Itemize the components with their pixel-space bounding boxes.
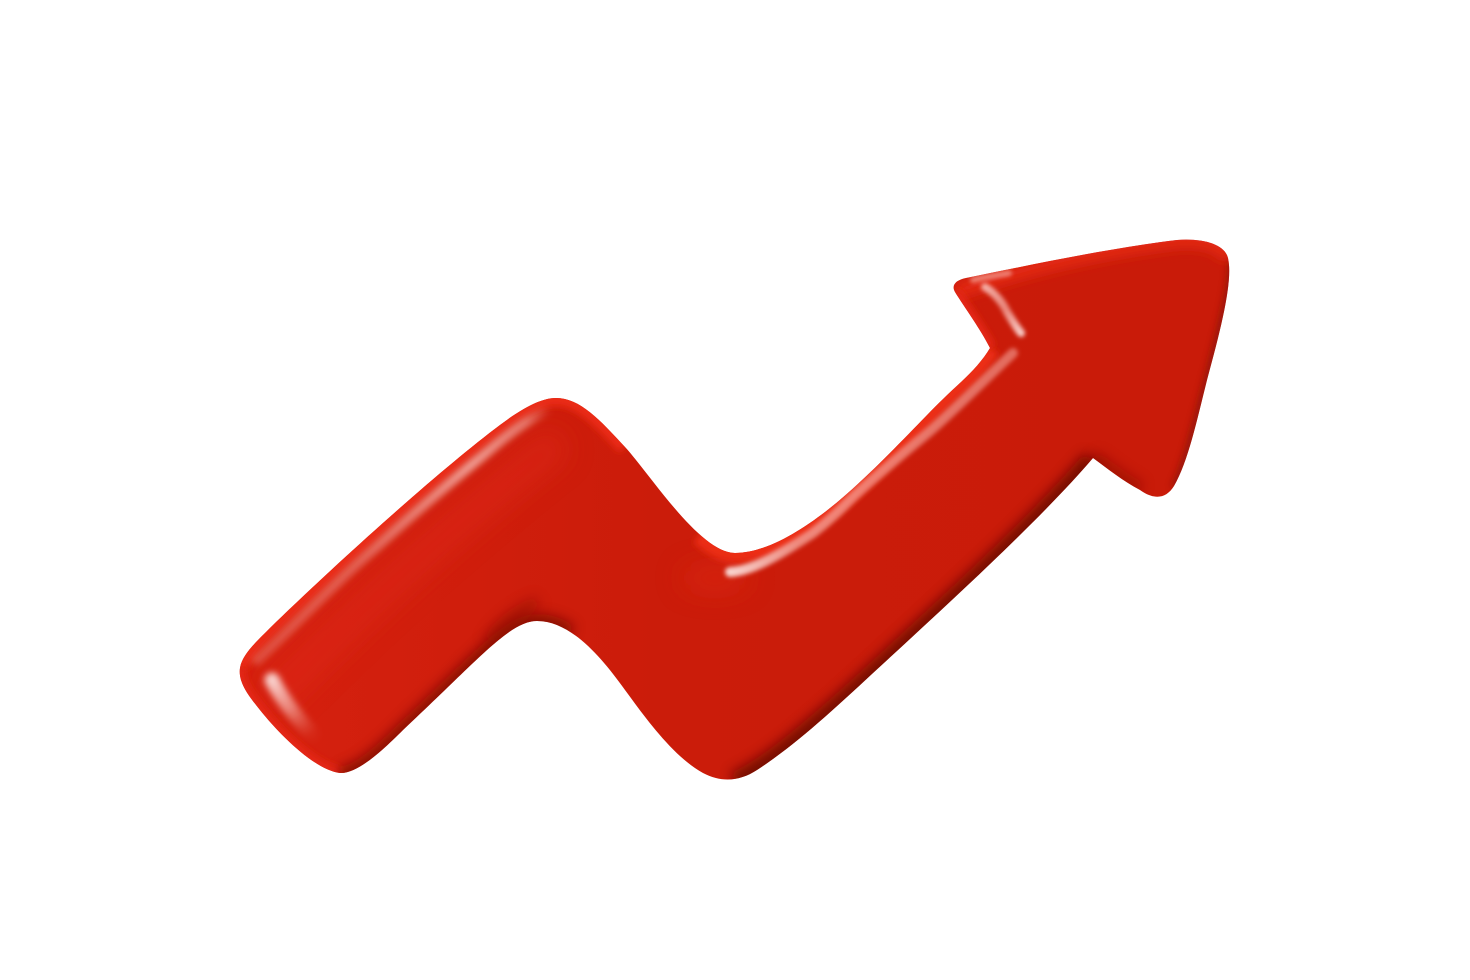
- highlight: right shaft band: [730, 353, 1013, 572]
- highlight: left shaft band: [257, 408, 550, 660]
- icon: 3D red zigzag arrow: [240, 240, 1230, 780]
- highlight: tail end cap: [272, 680, 312, 734]
- soft glow around lower bend: [712, 576, 718, 580]
- lower edge shading: [340, 623, 570, 775]
- highlight: arrowhead notch: [985, 287, 1021, 333]
- highlight: arrowhead top corner: [973, 273, 1009, 280]
- broad soft light on left shaft: [270, 440, 560, 700]
- saturated rim along upper edges: [240, 398, 625, 668]
- arrow body: [240, 240, 1232, 783]
